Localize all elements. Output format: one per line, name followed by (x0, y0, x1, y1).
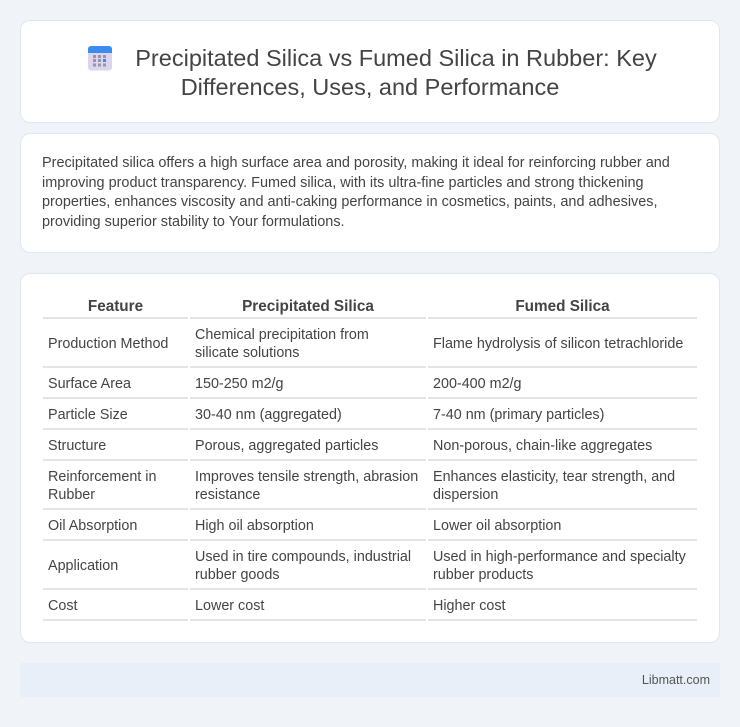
intro paragraph: properties, enhances viscosity and anti-caking performance in cosmetics, paints, and adhesives, (42, 194, 658, 210)
intro paragraph (42, 155, 670, 230)
row: cost: Lower cost (195, 598, 264, 614)
table header row: Precipitated Silica (242, 298, 374, 315)
row: application: Application (48, 558, 118, 574)
row: application: rubber goods (195, 567, 280, 583)
row: production method: silicate solutions (195, 345, 299, 361)
row: production method: Flame hydrolysis of silicon tetrachloride (433, 336, 683, 352)
row: production method: Chemical precipitation from (195, 327, 369, 343)
row: reinforcement in rubber: dispersion (433, 487, 498, 503)
panel: header (20, 20, 720, 123)
title: Differences, Uses, and Performance (181, 74, 559, 100)
row: reinforcement in rubber: Rubber (48, 487, 95, 503)
row: surface area (48, 376, 522, 392)
row: surface area: 200-400 m2/g (433, 376, 522, 392)
row: structure (48, 438, 652, 454)
row: structure: Porous, aggregated particles (195, 438, 378, 454)
footer bar (20, 663, 720, 697)
table header row (88, 298, 610, 315)
panel: comparison table (20, 273, 720, 643)
panel: intro text (20, 133, 720, 253)
row: oil absorption (48, 518, 561, 534)
row: application: Used in tire compounds, industrial (195, 549, 411, 565)
title (135, 45, 657, 100)
row: production method (48, 327, 683, 361)
row: reinforcement in rubber (48, 469, 675, 503)
table header row: Fumed Silica (515, 298, 610, 315)
row: application: Used in high-performance and specialty (433, 549, 686, 565)
row: particle size: Particle Size (48, 407, 128, 423)
intro paragraph: improving product transparency. Fumed silica, with its ultra-fine particles and strong thickening (42, 175, 644, 191)
row: application (48, 549, 686, 583)
row: cost (48, 598, 506, 614)
footer brand text: Libmatt.com (642, 673, 710, 687)
row: structure: Non-porous, chain-like aggregates (433, 438, 652, 454)
row: cost: Cost (48, 598, 78, 614)
intro paragraph: Precipitated silica offers a high surface area and porosity, making it ideal for reinforcing rubber and (42, 155, 670, 171)
row: particle size: 30-40 nm (aggregated) (195, 407, 342, 423)
row: particle size (48, 407, 604, 423)
row: oil absorption: High oil absorption (195, 518, 314, 534)
row: cost: Higher cost (433, 598, 506, 614)
row: structure: Structure (48, 438, 106, 454)
row: production method: Production Method (48, 336, 168, 352)
icon: calendar grid (88, 46, 112, 70)
row: reinforcement in rubber: Improves tensile strength, abrasion (195, 469, 418, 485)
row: application: rubber products (433, 567, 533, 583)
table header row: Feature (88, 298, 143, 315)
row: oil absorption: Oil Absorption (48, 518, 137, 534)
row: surface area: 150-250 m2/g (195, 376, 284, 392)
row: particle size: 7-40 nm (primary particles) (433, 407, 604, 423)
title: Precipitated Silica vs Fumed Silica in Rubber: Key (135, 45, 657, 71)
row: reinforcement in rubber: Enhances elasticity, tear strength, and (433, 469, 675, 485)
intro paragraph: providing superior stability to Your formulations. (42, 214, 345, 230)
row: reinforcement in rubber: resistance (195, 487, 260, 503)
row: reinforcement in rubber: Reinforcement in (48, 469, 156, 485)
row: surface area: Surface Area (48, 376, 131, 392)
row: oil absorption: Lower oil absorption (433, 518, 561, 534)
